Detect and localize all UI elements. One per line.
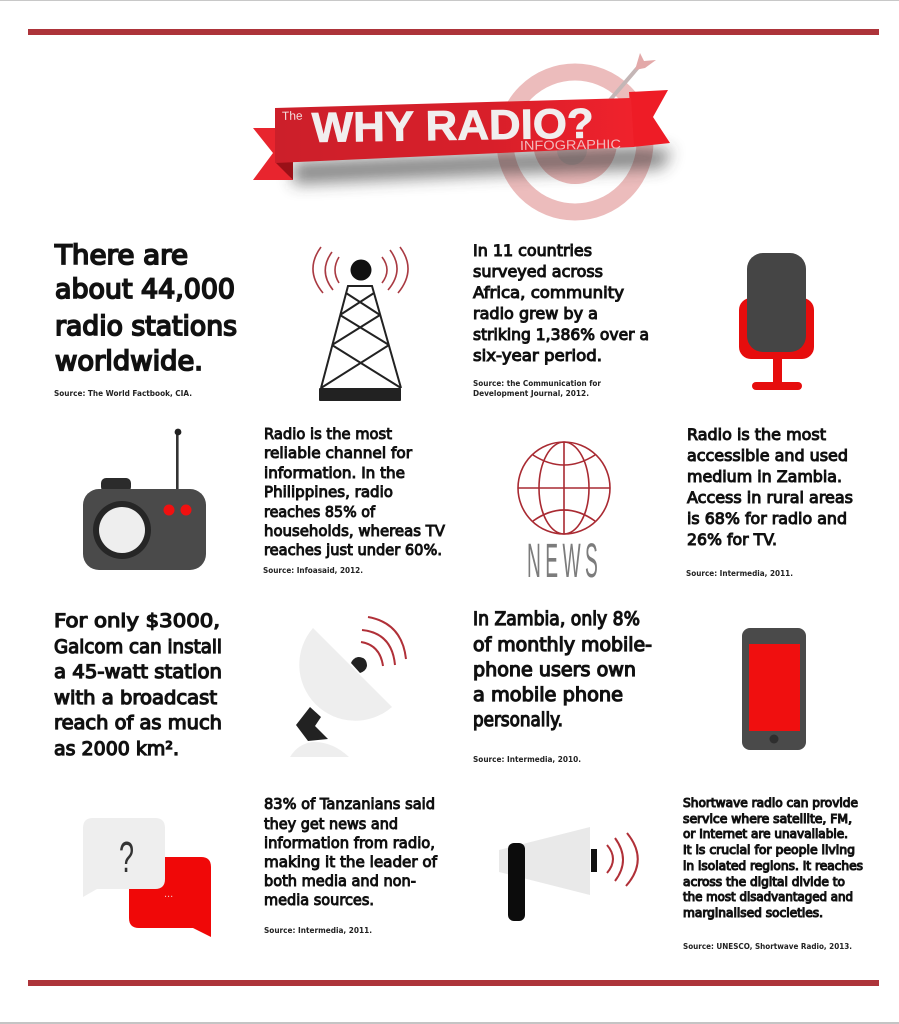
icon: microphone (739, 253, 814, 390)
text block: Tanzanians: 83% of Tanzanians said (264, 795, 435, 813)
text block: community radio in Africa: Africa, community (473, 283, 624, 302)
text block: Galcom station: Galcom can install (54, 636, 222, 658)
text block: shortwave radio: service where satellite, FM, (683, 812, 852, 826)
text block: shortwave radio: Shortwave radio can provide (683, 796, 858, 810)
text block: shortwave radio: in isolated regions. It reaches (683, 859, 863, 873)
text block: community radio in Africa: six-year period. (473, 346, 602, 365)
text block: Galcom station: reach of as much (54, 712, 222, 734)
text block: Zambia mobile phones (473, 609, 652, 764)
text block: Philippines reliability: Radio is the most (264, 425, 392, 443)
bottom red rule (28, 980, 879, 986)
banner text: INFOGRAPHIC: INFOGRAPHIC (520, 136, 621, 153)
text block: community radio in Africa (473, 241, 649, 398)
icon: speech bubbles (83, 818, 211, 937)
text block: Galcom station: as 2000 km². (54, 738, 179, 760)
text block: community radio in Africa: surveyed across (473, 262, 603, 281)
ribbon main band (275, 98, 634, 163)
text block: Tanzanians: information from radio, (264, 834, 435, 852)
banner shadow (293, 147, 672, 184)
text block: Tanzanians: Source: Intermedia, 2011. (264, 926, 372, 935)
icon: megaphone (499, 827, 638, 921)
text block: shortwave radio: across the digital divide to (683, 875, 845, 889)
text block: Zambia mobile phones: phone users own (473, 660, 636, 681)
icon: globe with NEWS: NEWS (527, 534, 598, 588)
text block: Galcom station: For only $3000, (54, 610, 220, 632)
text block: 44,000 stations: Source: The World Factbook, CIA. (54, 389, 192, 398)
icon: satellite dish (290, 617, 406, 757)
banner text: The: The (282, 109, 303, 123)
text block: 44,000 stations: radio stations (55, 311, 237, 342)
text block: Zambia access (686, 425, 853, 578)
text block: Zambia mobile phones: Source: Intermedia, 2010. (473, 755, 581, 764)
text block: Philippines reliability: reaches just under 60%. (264, 541, 442, 559)
text block: Tanzanians: both media and non- (264, 872, 416, 890)
icon: target with arrow (505, 53, 656, 212)
text block: shortwave radio: or Internet are unavailable. (683, 827, 848, 841)
text block: Tanzanians: media sources. (264, 891, 374, 909)
icon: radio tower (313, 247, 408, 401)
ribbon right tail (629, 90, 670, 147)
text block: Zambia mobile phones: personally. (473, 710, 563, 731)
text block: Zambia access: Access in rural areas (687, 488, 853, 507)
ribbon left tail (253, 128, 293, 180)
icon: speech bubbles: ? (119, 833, 134, 882)
text block: Zambia mobile phones: In Zambia, only 8% (473, 609, 640, 630)
icon: speech bubbles: ... (164, 888, 173, 900)
text block: Galcom station (54, 610, 222, 760)
text block: community radio in Africa: radio grew by a (473, 304, 598, 323)
text block: community radio in Africa: Source: the Communication for (473, 379, 601, 388)
text block: Zambia access: Radio is the most (687, 425, 826, 444)
text block: shortwave radio: the most disadvantaged and (683, 890, 853, 904)
text block: Philippines reliability: Source: Infoasaid, 2012. (263, 566, 363, 575)
text block: shortwave radio: marginalised societies. (683, 906, 823, 920)
text block: Zambia access: is 68% for radio and (687, 509, 847, 528)
banner text: WHY RADIO?: WHY RADIO? (311, 100, 594, 151)
icon: globe with NEWS (518, 442, 610, 588)
text block: Philippines reliability: reaches 85% of (264, 503, 375, 521)
text block: Philippines reliability (263, 425, 445, 575)
text block: 44,000 stations: worldwide. (55, 346, 203, 377)
text block: Tanzanians (264, 795, 438, 935)
text block: shortwave radio: It is crucial for people living (683, 843, 855, 857)
text block: Zambia access: Source: Intermedia, 2011. (686, 569, 793, 578)
text block: Galcom station: a 45-watt station (54, 661, 222, 683)
text block: Zambia mobile phones: a mobile phone (473, 685, 623, 706)
text block: shortwave radio: Source: UNESCO, Shortwave Radio, 2013. (683, 942, 852, 951)
top red rule (28, 29, 879, 35)
text block: Zambia access: 26% for TV. (687, 530, 777, 549)
icon: mobile phone (742, 628, 806, 750)
text block: Philippines reliability: Philippines, radio (264, 483, 393, 501)
text block: 44,000 stations: There are (54, 240, 188, 271)
text block: 44,000 stations (54, 240, 237, 398)
text block: Zambia mobile phones: of monthly mobile- (473, 635, 652, 656)
icon: portable radio (83, 429, 206, 570)
text block: Tanzanians: making it the leader of (264, 853, 438, 871)
text block: community radio in Africa: Development Journal, 2012. (473, 389, 589, 398)
title banner (253, 53, 672, 212)
text block: 44,000 stations: about 44,000 (55, 274, 235, 305)
text block: Galcom station: with a broadcast (54, 687, 217, 709)
text block: Zambia access: accessible and used (687, 446, 848, 465)
text block: Zambia access: medium in Zambia. (687, 467, 842, 486)
text block: Philippines reliability: information. In the (264, 464, 405, 482)
text block: shortwave radio (683, 796, 863, 951)
text block: community radio in Africa: In 11 countries (473, 241, 592, 260)
text block: community radio in Africa: striking 1,386% over a (473, 325, 649, 344)
text block: Philippines reliability: reliable channel for (264, 444, 413, 462)
text block: Philippines reliability: households, whereas TV (264, 522, 445, 540)
text block: Tanzanians: they get news and (264, 815, 398, 833)
